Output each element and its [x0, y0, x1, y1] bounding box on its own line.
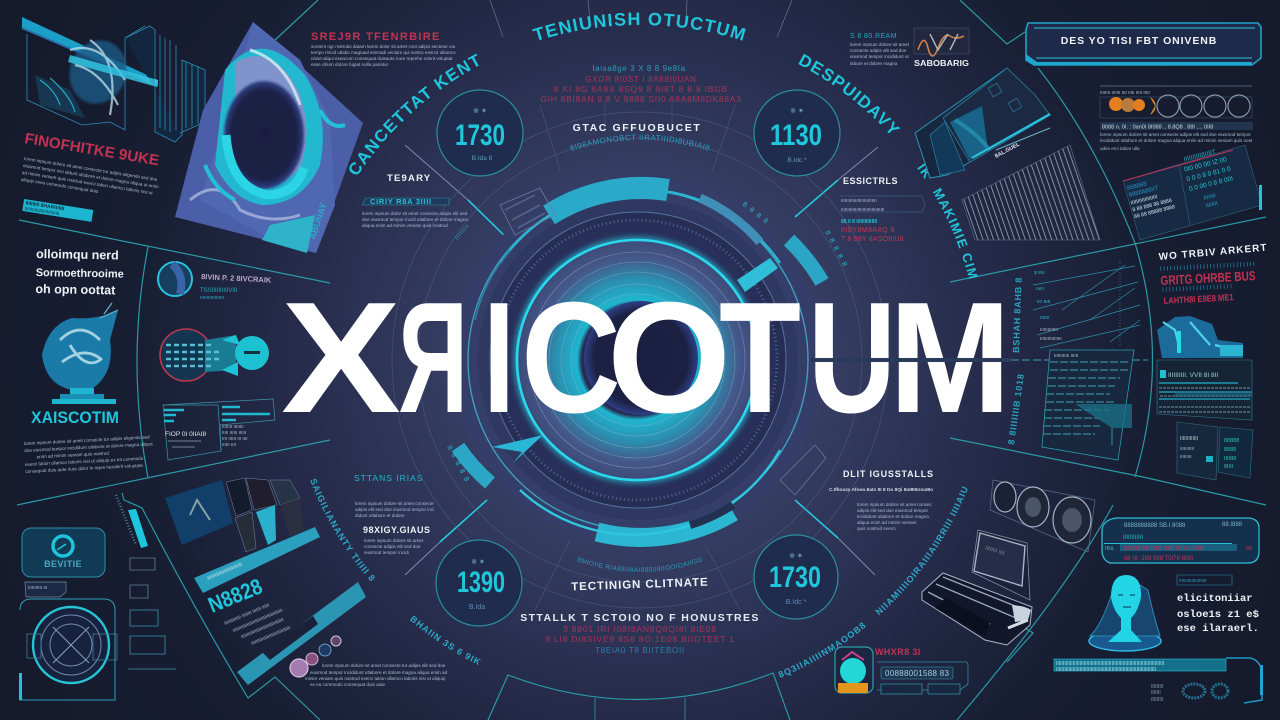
- tilted data card: 0 0 0 8 0 81 0 0: [1186, 165, 1232, 183]
- paired cards: IIIIIIIII: [1180, 454, 1192, 459]
- text block: dlit: lorem inpsum dolore sit amet consec: [857, 502, 933, 507]
- gauge panel: bottom left: [22, 528, 105, 577]
- hatched chart: [962, 145, 1100, 240]
- bottom centre text block: 3 8801 IRI I08I8AN8Q8QI8I 8IE08: [563, 624, 717, 634]
- text block: left panel: ad minim veniam quis nostrud exerci tation ullamco laboris nisi ut: [22, 170, 154, 196]
- text block: stamp: consecte adipis elit sed doe: [850, 48, 907, 53]
- text block: left column: exerci tation ullamco laboris nisi ut aliquip ex ea commodo: [25, 456, 144, 467]
- vertical caption: right: 8 8IIIIIIIB 1018: [1006, 373, 1026, 445]
- text block: dlit: incididunt utlabore et dolore magna: [857, 514, 929, 519]
- caption: disc: TSSIIIIIIIIIIVIII: [200, 288, 238, 294]
- arc caption: lower right: NIIAMIIIIOIRAIIIAIIRRIII IIIIAIU: [875, 486, 968, 616]
- red-cyan copy: right column: [1160, 261, 1257, 306]
- stat circle: top left: ※ ✶: [473, 107, 487, 115]
- vase illustration: [42, 303, 118, 404]
- cyan data bar: IIIIIIIIIIIIIIIIIIIIIIIIIIIIIIIIIIIIIIIIIIIIIIIIIIIIIIIIIIIIIIIIIIIIIIII: [1056, 667, 1156, 673]
- white heading: right column: WO TRBIV ARKERT: [1158, 243, 1268, 263]
- tilted data card: IIIIIIIIIIIIIIIIIII: [1130, 194, 1158, 207]
- line chart: 0I00: [1040, 315, 1050, 321]
- thumbnail disc: [158, 262, 192, 296]
- line chart: [1033, 260, 1140, 348]
- tilted data card: 8888888IIT: [1128, 186, 1159, 199]
- main title: C: [521, 270, 621, 446]
- main title: R: [398, 270, 468, 446]
- gauge panel: bottom left: BEVITIE: [44, 559, 82, 569]
- heading: dlit igusstalls: DLIT IGUSSTALLS: [843, 469, 934, 479]
- title scan band: [810, 358, 1148, 362]
- block: sttans irias: didunt utlabore et dolore: [355, 513, 405, 518]
- stat circle: bottom left: ※ ✶: [471, 558, 485, 566]
- text block: left panel: eiusmod tempor inci didunt utlabore et dolore magna aliqua ut enim: [23, 163, 159, 189]
- cyan tag: IIIIIIIIIIIIIIIIIIIIIIIIIIII: [24, 206, 60, 216]
- main title: O: [607, 270, 731, 446]
- outer teal arc segments: [458, 188, 822, 537]
- line chart: IaIII: [1036, 286, 1044, 292]
- heading: sttans irias: STTANS IRIAS: [354, 473, 423, 483]
- stat circle: bottom right: 1730: [769, 561, 821, 594]
- paired cards: 8888: [1224, 447, 1236, 453]
- small text: teary: TE9ARY: [387, 173, 431, 184]
- block: sttans irias: 98XIGY.GIAUS: [363, 525, 431, 535]
- stat circle: bottom right: ※ ✶: [789, 552, 803, 560]
- text stack on lower teal bar: [223, 582, 366, 685]
- caption: disc: 8IVIN P. 2 8IVCRAIK: [201, 272, 272, 285]
- paired cards: IIIIIIIIIII: [1180, 446, 1194, 451]
- text block: left column: consequat duis aute irure dolor in repre henderit voluptate: [25, 463, 144, 474]
- text block: upper left: nisiut aliqui exeacom consequat duisaute irure reprehe nderit voluptat: [311, 56, 453, 61]
- caption: disc: IIIIIIIIIIIIIIIIII: [200, 295, 224, 301]
- stamp thumbnail: [914, 28, 969, 68]
- bottom centre text block: T8EIA0 T8 BIITEBOII: [595, 646, 685, 655]
- twin tables: FIOP 0I 0IIAI8: [165, 431, 206, 438]
- wireframe building illustration: [22, 17, 205, 142]
- dial tick labels: 8 8 8 8 8: [445, 445, 471, 484]
- line chart: IIIIIIIIIIIIIIIII: [1040, 336, 1062, 341]
- twin tables: IIIIIIII IIIIIIII: [222, 424, 244, 429]
- arc heading: right: DESPUIDAVY: [798, 54, 900, 134]
- strip table: udex erci tation ulla: [1100, 146, 1140, 151]
- stat circle: top left: [437, 90, 523, 176]
- strip table: 8088 n. 0I. : 0an0I 8I088 .. 8.8Q8 . 88I .... 0II8: [1102, 124, 1213, 130]
- main title: T: [719, 270, 801, 446]
- text block: upper left: tempo rincid utlabo magnaal enimadi veniam qui nostru exercit ullamco: [311, 50, 456, 55]
- header bar: teary: CIRIY R8A 3IIII: [370, 197, 432, 206]
- teal arrow: [492, 435, 543, 463]
- text block: stamp: S 8 80.REAM: [850, 33, 897, 40]
- top centre text block: GIH 8BI8AN 9 8 V 9888 SII0 A8A8M6DK88A3: [540, 94, 742, 104]
- chips: character: 00888001588 83: [885, 669, 950, 678]
- cyan tag: [22, 199, 93, 222]
- text block: bottom: lorem inpsum dolore sit amet consecte tur adipis elit sed doe: [322, 663, 446, 668]
- red-cyan copy: right column: IIIIIIIIIIIIIIIIIIIII: [1162, 283, 1232, 294]
- strip table: lorem inpsum dolore sit amet consecte adipis elit sed doe eiusmod tempor: [1100, 132, 1251, 137]
- teal screens panel: [165, 478, 320, 593]
- tilted data card: 0I0 00 00 IZ 00: [1184, 156, 1228, 174]
- paired cards: 88888: [1224, 438, 1239, 444]
- text block: left panel: aliquip exea commodo consequat duis: [21, 177, 99, 194]
- strip table: [1100, 122, 1253, 151]
- text block: dlit: quis nostrud exerci: [857, 526, 896, 531]
- block: essictres: [840, 196, 925, 243]
- lens diagram: [160, 329, 269, 381]
- arc caption: lower right: 8Q3IIAIIIINMAOOB8: [778, 622, 866, 678]
- text block: bottom: eiusmod tempor incididunt utlabore et dolore magna aliqua enim ad: [310, 670, 448, 675]
- tablet illustration: 8AL.GUEL: [994, 141, 1022, 160]
- arc caption: lower left: SAIGILIANANTY TIIIII 8: [310, 478, 375, 581]
- bottom centre text block: STTALLK T SCTOIO NO F HONUSTRES: [520, 612, 760, 624]
- main title: [281, 270, 1011, 446]
- block: sttans irias: lorem inpsum dolore sit amet: [364, 538, 424, 543]
- tilted data card: 0 0 00 0 8 8 00I: [1188, 175, 1234, 193]
- stat circle: bottom left: 1390: [457, 566, 505, 599]
- portal illustration: [175, 22, 363, 253]
- main title: I: [483, 270, 515, 446]
- text block: upper left: esse cillum dolore fugiat nulla pariatur: [311, 62, 389, 67]
- stamp thumbnail: SABOBARIG: [914, 59, 969, 68]
- status panel: 68: [1246, 546, 1252, 552]
- arc heading: top: TENIUNISH OTUCTUM: [532, 12, 746, 41]
- bottom-left side stack: [116, 495, 176, 669]
- twin tables: IIII IIIIII III IIII: [222, 436, 248, 441]
- top centre text block: Iaisa8ge 3 X 8 8 9e8Ia: [592, 64, 686, 73]
- text block: left column: lorem inpsum dolore sit amet consecte tur adipis eligendo sed: [24, 434, 150, 446]
- white copy: left column: [35, 247, 124, 298]
- main title: U: [808, 270, 896, 446]
- main title: M: [889, 270, 1011, 446]
- paired cards: [1177, 422, 1253, 480]
- text stack on lower teal bar: IIIIIIIIIIIIIIIIIIIIIIIIIIIIIIIIIIII: [240, 617, 284, 640]
- status panel: I8I (8 ·188 988 T0I78 I880: [1124, 556, 1194, 562]
- status panel: 88.I888: [1222, 522, 1243, 528]
- stat circle: top left: B.Ida 8: [472, 155, 493, 162]
- text block: teary: aliqua enim ad minim veniam quis nostrud: [362, 223, 448, 228]
- heading: essictres: ESSICTRLS: [843, 176, 898, 186]
- strip table: incididunt utlabore et dolore magna aliqua enim ad minim veniam quis nost: [1100, 138, 1253, 143]
- cyan code: N8828: [205, 573, 266, 618]
- text block: dlit: [829, 487, 933, 531]
- block: essictres: 8I8Y8M8A8Q 8: [841, 227, 895, 234]
- tilted data card: 8 88 888 88 8888: [1132, 198, 1173, 213]
- teal screens panel: IIIIIIIIIIIIIIIIIIIIIIIIIII: [206, 562, 243, 582]
- text block: upper left: sontent ogr mstrutio datam lorem dolor sit amet coni adipis sectetur eiu: [311, 44, 456, 49]
- cyan tag: IIIIIIIIII 8HAINVIIII: [25, 200, 65, 212]
- text block: left panel: lorem inpsum dolore sit amet consecte tur adipis eligendo sed doe: [24, 156, 158, 182]
- stat circle: bottom left: B.Ida: [469, 604, 485, 611]
- central radial dial: [445, 176, 849, 544]
- text block: left panel: [21, 156, 160, 203]
- text block: bottom: ex ea commodo consequat duis aute: [310, 682, 386, 687]
- caption: hologram: [1177, 575, 1259, 635]
- dial tick labels: [445, 201, 849, 484]
- radial connector lines: [405, 0, 878, 610]
- white copy: left column: Sormoethrooime: [36, 267, 124, 281]
- text block: left column: [24, 434, 154, 474]
- data sheet: IIIIIIIIIIII IIIIII: [1054, 353, 1078, 358]
- block: essictres: 88 II 8 IIIIIIIIIIIIIII: [841, 219, 878, 225]
- block: essictres: IIIIIIIIIIIIIIIIIIIIIIIIIIIIIIIIII: [841, 207, 884, 212]
- text stack on lower teal bar: IIIIIIIIIIIIIIIIIIIIIIIIIIIIIIIII: [250, 625, 291, 646]
- caption: hologram: osloe1s z1 e$: [1177, 609, 1259, 621]
- stat circle: top right: 1130: [770, 119, 822, 152]
- cyan data bar: [1054, 658, 1263, 703]
- status panel: 8888888888 SB.I 8088: [1124, 523, 1186, 529]
- stat circle: bottom right: B.Idc *: [786, 599, 807, 606]
- top centre text block: 8 KI 8G 8A8S 8SQ9 8 9I8T 8 8 8 IBGB: [554, 84, 728, 94]
- bottom centre text block: [520, 577, 760, 655]
- text block: stamp: labore et dolore magna: [850, 61, 898, 66]
- text block: stamp: eiusmod tempor incididunt ut: [850, 54, 909, 59]
- twin tables: [163, 399, 275, 460]
- character icon: [835, 647, 873, 693]
- top centre text block: GTAC GFFUOBUCET: [573, 122, 701, 134]
- line chart: 87.8I8: [1037, 299, 1051, 305]
- block: sttans irias: adipis elit sed doe eiusmod tempor inci: [355, 507, 434, 512]
- top-right banner: DES YO TISI FBT ONIVENB: [1061, 35, 1217, 47]
- arc heading: far right: MAKIMIE CIM: [933, 188, 978, 279]
- landscape illustration: [1157, 316, 1243, 358]
- red-cyan copy: right column: LAHTH8I E8E8 ME1: [1163, 292, 1234, 306]
- dial tick labels: IIIIIIII: [454, 223, 471, 241]
- HUD reticle: [19, 599, 117, 700]
- data sheet: [1042, 350, 1134, 460]
- vertical caption: right: [1006, 277, 1026, 445]
- caption: hologram: ese ilaraerl.: [1177, 623, 1259, 635]
- twin tables: IIIII IIIIII IIIIII: [222, 430, 246, 435]
- caption: hologram: IIIIIIIIIIIIIIIIIIIIII: [1179, 578, 1207, 583]
- status panel: [1102, 518, 1259, 563]
- white copy: left column: oh opn oottat: [35, 282, 116, 297]
- tilted data card: IIIIIIII: [1205, 201, 1219, 210]
- block: sttans irias: lorem inpsum dolore sit amet consecte: [355, 501, 434, 506]
- arc heading: far right: IK: [917, 164, 928, 180]
- vertical caption: left: ABUNAY: [307, 202, 329, 241]
- text block: teary: doe eiusmod tempor incidi utlabore et dolore magna: [362, 217, 468, 222]
- product name: left column: XAISCOTIM: [31, 408, 119, 427]
- stat circle: top left: 1730: [455, 119, 505, 152]
- twin tables: IIIIII IIII: [222, 442, 236, 447]
- arc caption: lower left: [310, 478, 481, 665]
- cyan data bar: IIIIIIIIIIIIIIIIIIIIIIIIIIIIIIIIIIIIIIIIIIIIIIIIIIIIIIIIIIIIIIIIIIIIIIIIIIIIII: [1056, 661, 1164, 667]
- bottom centre text block: TECTINIGN CLITNATE: [571, 577, 709, 593]
- text block: stamp: lorem inpsum dolore sit amet: [850, 42, 910, 47]
- block: sttans irias: [355, 501, 434, 555]
- vertical caption: right: BSHAH 8AHB 8: [1011, 277, 1024, 353]
- top centre arc caption: 8I98AMONOBCT IIRATIIIDI8UBIAI8: [570, 134, 710, 151]
- block: sttans irias: consecte adipis elit sed doe: [364, 544, 421, 549]
- top centre text block: [540, 64, 742, 134]
- text block: dlit: aliqua enim ad minim veniam: [857, 520, 917, 525]
- paired cards: 8IIII: [1224, 464, 1234, 470]
- text block: dlit: C.Ifbourp Afooo.8aIn 8I 8 Do 8Qi 8oI8IIInouI8o: [829, 487, 933, 493]
- paired cards: IIII88: [1224, 456, 1236, 462]
- top centre text block: GXOR 8I0ST I 8A88I0UAN: [585, 75, 697, 84]
- tablet illustration: [915, 68, 1050, 178]
- text block: left column: enim ad minim veniam quis nostrud: [37, 451, 109, 459]
- retro computer: IIIIIIII IIII: [984, 545, 1006, 557]
- chips: character: [877, 662, 968, 694]
- hologram head: [1089, 575, 1161, 651]
- block: essictres: IIIIIIIIIIIIIIIIIIIIIIIIIIII: [841, 198, 877, 203]
- paired cards: IIIIIIIIIIIII: [1180, 436, 1198, 442]
- line chart: IIIIIIIIIIIIII: [1040, 327, 1058, 332]
- bottom centre text block: 9 LI8 DI8SIVE9 8S8 8O:1E08 BIIOTEET 1: [545, 634, 735, 644]
- tilted data card: 88 88 88888 8888: [1134, 204, 1176, 220]
- red label: character: WHXR8 3I: [875, 647, 921, 657]
- tilted data card: 888888: [1127, 181, 1148, 192]
- red-cyan copy: right column: IIIIIIIIIIIIIIIIIIIIIIIIIIIII: [1160, 261, 1255, 273]
- line chart: $ 8III: [1034, 270, 1045, 276]
- stat circle: bottom left: [436, 540, 522, 626]
- block: sttans irias: eiusmod tempor incidi: [364, 550, 409, 555]
- medallion strip: IIIIIIII IIIIIII IIII IIIII IIIII IIIII: [1100, 90, 1150, 95]
- label chip: IIIIIIIIIII III: [28, 585, 47, 590]
- status panel: 88888 88 I888 888 88IIA 8888: [1124, 546, 1205, 552]
- dial tick labels: 8 8 8 8: [741, 201, 770, 226]
- text block: left column: doe eiusmod tempor incididunt utlabore et dolore magna aliqua: [24, 441, 153, 453]
- icon row: [290, 636, 341, 677]
- data table: right column: IIIIIIIIII. VVII 8I 8II: [1168, 372, 1218, 379]
- arc caption: lower right: [778, 486, 968, 678]
- retro computer: [922, 530, 1032, 645]
- mini legend: 8II8III: [1151, 684, 1164, 690]
- mini legend: 8II8III: [1151, 697, 1164, 703]
- text block: stamp: [850, 33, 910, 66]
- stat circle: top right: [754, 90, 840, 176]
- mini legend: [1151, 684, 1228, 703]
- red-cyan copy: right column: GRITG OHRBE BUS: [1160, 268, 1256, 288]
- three plates: [990, 480, 1095, 552]
- stat circle: top right: ※ ✶: [790, 107, 804, 115]
- tilted data card: [1123, 145, 1262, 240]
- mini legend: 8II8I: [1151, 690, 1161, 696]
- arc heading: far right: [917, 164, 978, 279]
- text block: dlit: adipis elit sed doe eiusmod tempor: [857, 508, 928, 513]
- text stack on lower teal bar: IIIIIIIIIIIIII IIIIIIII IIIIIII IIIIII: [223, 602, 270, 626]
- arc heading: left: CANCETTAT KENT: [349, 54, 479, 174]
- data table: right column: [1157, 360, 1252, 420]
- teal wedge: [737, 258, 778, 292]
- block: essictres: T 8 88Y 8ASO8IU8: [841, 236, 904, 243]
- concentric guide arcs: [392, 112, 888, 608]
- caption: hologram: elicitoniiar: [1177, 593, 1253, 605]
- text block: bottom: minim veniam quis nostrud exerci tation ullamco laboris nisi ut aliquip: [305, 676, 446, 681]
- text block: teary: [362, 211, 468, 228]
- bright ring with glow: [517, 240, 757, 480]
- stat circle: bottom right: [754, 535, 838, 619]
- medallion strip: [1100, 86, 1252, 118]
- status panel: IB&: [1105, 546, 1114, 552]
- arc caption: lower left: BHAIIN 3S 6 9IK: [410, 616, 481, 665]
- top-right banner: [1026, 23, 1261, 65]
- text block: upper left: [311, 44, 456, 67]
- red heading: left panel: FINOFHITKE 9UKE: [23, 130, 160, 169]
- tilted data card: IIIIIIII: [1203, 193, 1217, 202]
- tilted data card: IIIIIIIIII8II8T: [1183, 149, 1217, 163]
- text block: bottom: [305, 663, 448, 687]
- caption: disc: [200, 272, 272, 301]
- status panel: IIIIIIIIIIII: [1123, 535, 1143, 541]
- dial tick labels: 8 8 8 8 8: [823, 230, 849, 269]
- red heading: upper left: SREJ9R TFENRBIRE: [311, 31, 441, 43]
- text block: teary: lorem inpsum dolor sit amet consecte adipis elit sed: [362, 211, 468, 216]
- stat circle: top right: B.Idc *: [787, 157, 807, 164]
- main title: X: [281, 270, 401, 446]
- label chip: [25, 582, 66, 597]
- text stack on lower teal bar: IIIIIIIIIIIIIIIIIIIIIIIIIIIIIIIIIIIIIIIIII: [232, 608, 283, 633]
- white copy: left column: olloimqu nerd: [36, 247, 119, 262]
- bottom centre arc caption: 8MIOIIE RIA88IIAAI88008IIOOIOAIIGG: [578, 557, 702, 572]
